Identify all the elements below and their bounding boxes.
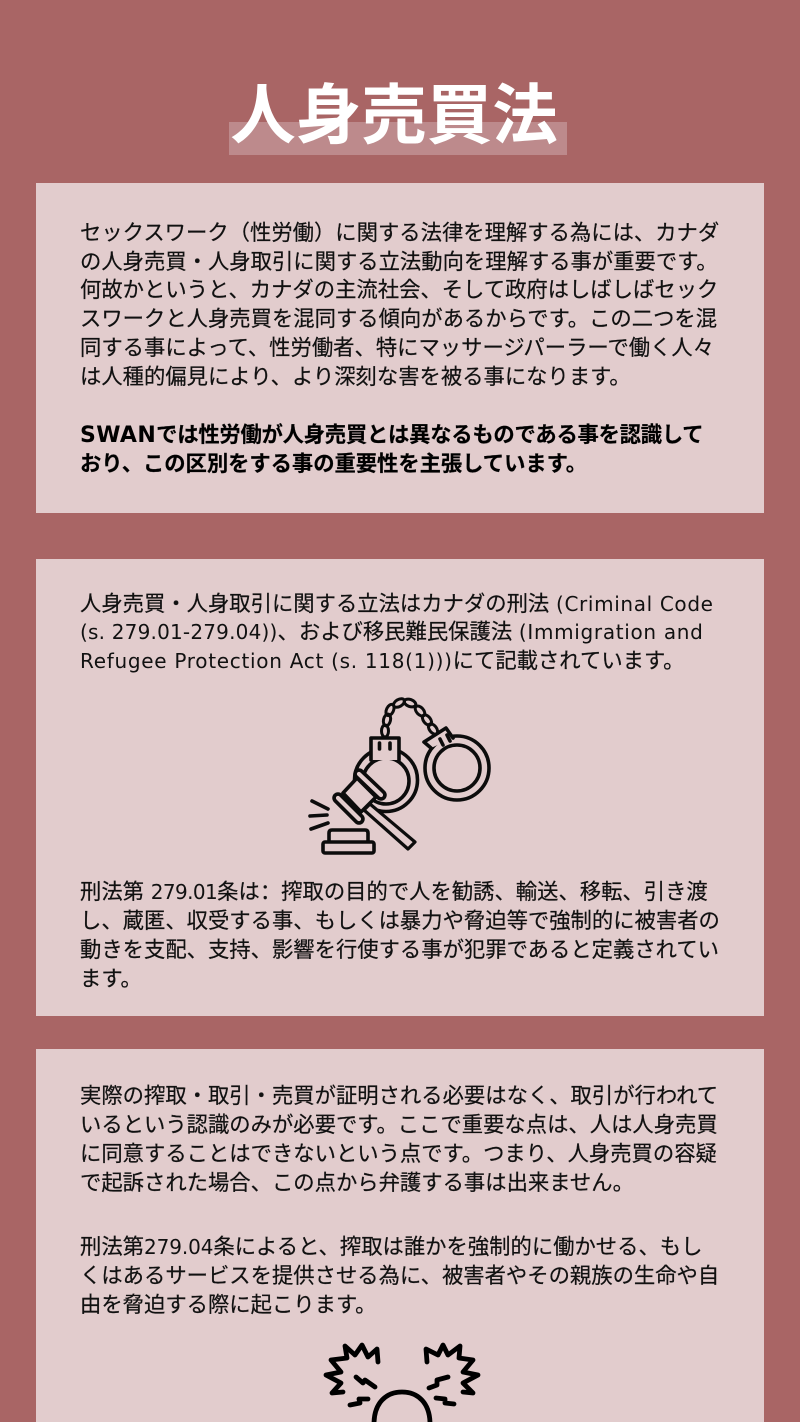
text block: section 279.04 (80, 1230, 719, 1319)
small sparks (350, 1377, 454, 1405)
text block: consent: 実際の搾取・取引・売買が証明される必要はなく、取引が行われて (80, 1079, 718, 1110)
text block: legislation sources: 人身売買・人身取引に関する立法はカナダの刑法 (Criminal Code (80, 587, 714, 618)
text block: introduction: は人種的偏見により、より深刻な害を被る事になります。 (80, 360, 631, 391)
text block: legislation sources: Refugee Protection Act (s. 118(1)))にて記載されています。 (80, 644, 684, 675)
text block: introduction (80, 216, 719, 391)
text block: consent: いるという認識のみが必要です。ここで重要な点は、人は人身売買 (80, 1108, 718, 1139)
text block: consent (80, 1079, 718, 1197)
text block: section 279.01 (80, 875, 720, 993)
impact lines (310, 801, 328, 829)
chain (382, 697, 439, 737)
text block: SWAN statement (80, 418, 703, 478)
left handcuff (354, 738, 418, 812)
icon: distressed head with bursts (324, 1342, 480, 1422)
text block: SWAN statement: おり、この区別をする事の重要性を主張しています。 (80, 447, 587, 478)
text block: section 279.04: くはあるサービスを提供させる為に、被害者やその親族の生命や自 (80, 1259, 719, 1290)
text block: introduction: セックスワーク（性労働）に関する法律を理解する為には、カナダ (80, 216, 719, 247)
right burst (426, 1345, 478, 1393)
text block: introduction: 同する事によって、性労働者、特にマッサージパーラーで働く人々 (80, 331, 714, 362)
icon: gavel and handcuffs (308, 697, 491, 855)
title highlight bar (229, 122, 567, 155)
panel: exploitation (36, 1049, 764, 1422)
text block: consent: に同意することはできないという点です。つまり、人身売買の容疑 (80, 1137, 717, 1168)
text block: section 279.04: 刑法第279.04条によると、搾取は誰かを強制的に働かせる、もし (80, 1230, 702, 1261)
head (374, 1392, 430, 1422)
panel: introduction (36, 183, 764, 513)
right handcuff (424, 728, 489, 800)
text block: SWAN statement: SWANでは性労働が人身売買とは異なるものである事を認識して (80, 418, 703, 449)
text block: section 279.01: 刑法第 279.01条は：搾取の目的で人を勧誘、輸送、移転、引き渡 (80, 875, 708, 906)
title: 人身売買法 (230, 62, 558, 157)
text block: legislation sources: (s. 279.01-279.04))、および移民難民保護法 (Immigration and (80, 615, 704, 646)
text block: section 279.04: 由を脅迫する際に起こります。 (80, 1288, 376, 1319)
gavel base (323, 830, 374, 853)
left burst (326, 1345, 378, 1393)
text block: section 279.01: ます。 (80, 962, 142, 993)
text block: introduction: スワークと人身売買を混同する傾向があるからです。この二つを混 (80, 302, 717, 333)
gavel (338, 774, 415, 849)
text block: legislation sources (80, 587, 714, 675)
text block: section 279.01: し、蔵匿、収受する事、もしくは暴力や脅迫等で強制的に被害者の (80, 904, 720, 935)
text block: section 279.01: 動きを支配、支持、影響を行使する事が犯罪であると定義されてい (80, 933, 719, 964)
panel: legislation (36, 559, 764, 1016)
text block: introduction: 何故かというと、カナダの主流社会、そして政府はしばしばセック (80, 273, 718, 304)
text block: introduction: の人身売買・人身取引に関する立法動向を理解する事が重要です。 (80, 245, 718, 276)
text block: consent: で起訴された場合、この点から弁護する事は出来ません。 (80, 1166, 634, 1197)
